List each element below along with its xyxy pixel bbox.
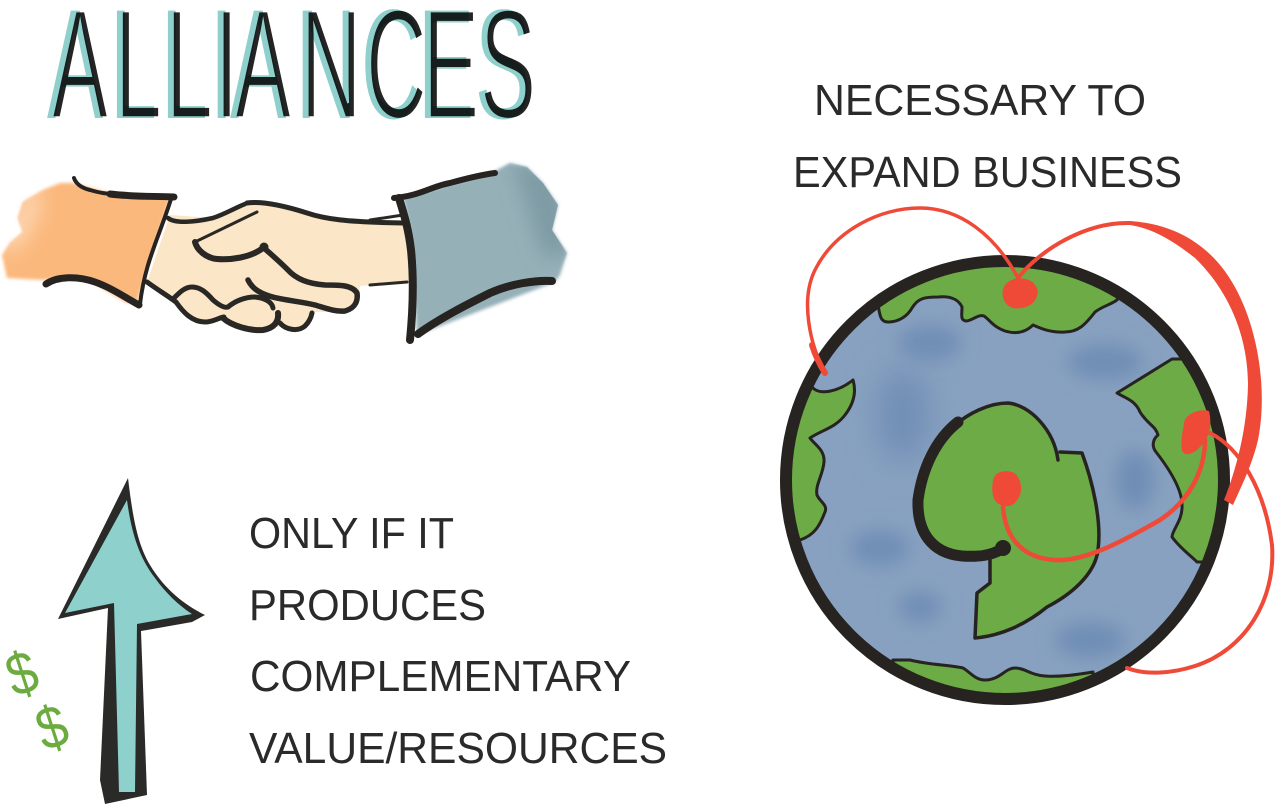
hand outlines: [147, 203, 407, 330]
land: north: [877, 267, 1118, 334]
land: south: [892, 658, 1094, 693]
text: only if it produces complementary value/resources: COMPLEMENTARY: [250, 652, 631, 701]
sleeve outlines: [46, 173, 552, 340]
connection lines: [808, 208, 1272, 673]
land: center: [919, 403, 1099, 638]
text: necessary to expand business: [793, 76, 1182, 197]
text: only if it produces complementary value/resources: [249, 509, 667, 773]
land: east: [1115, 358, 1218, 564]
text: necessary to expand business: NECESSARY TO: [814, 76, 1146, 125]
icon: dollar signs: $: [27, 691, 76, 764]
text: only if it produces complementary value/resources: VALUE/RESOURCES: [249, 724, 667, 773]
hand: skin: [147, 203, 412, 330]
text: only if it produces complementary value/resources: PRODUCES: [249, 581, 486, 630]
icon: handshake: [0, 160, 575, 340]
land: west: [792, 378, 856, 542]
sleeve: blue: [403, 163, 567, 335]
icon: dollar signs: [0, 637, 76, 764]
sleeve: orange: [2, 183, 170, 303]
text: necessary to expand business: EXPAND BUSINESS: [793, 148, 1182, 197]
text: only if it produces complementary value/resources: ONLY IF IT: [249, 509, 454, 558]
icon: globe: [780, 255, 1230, 705]
icon: up arrow: [58, 478, 205, 804]
markers: red scribbles: [994, 279, 1209, 505]
